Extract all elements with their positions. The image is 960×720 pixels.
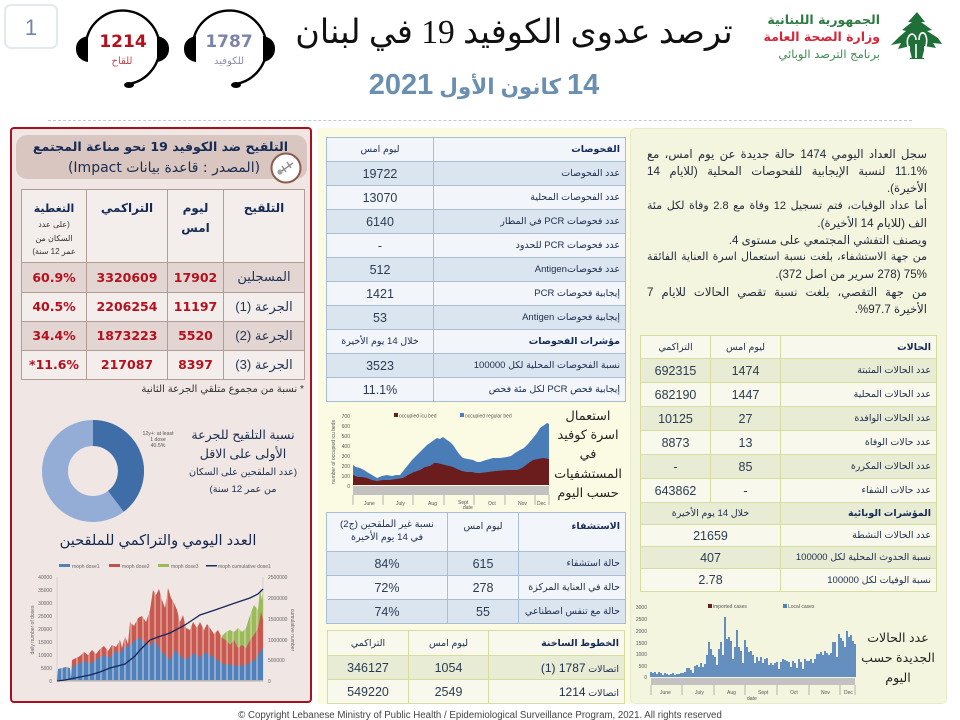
tests table: عدد فحوصات PCR للحدود: [516, 240, 620, 251]
tests table: عدد فحوصاتAntigen: [535, 264, 620, 275]
hotlines table: الخطوط الساخنة: [541, 638, 619, 648]
hospital beds chart: 400: [342, 444, 350, 450]
vaccination table: التراكمي: [101, 201, 153, 215]
cases table: عدد الحالات المكررة: [851, 461, 931, 472]
tests table: [326, 137, 626, 402]
hospital beds chart: Dec: [537, 501, 546, 507]
vaccination table: 11197: [174, 299, 217, 314]
cases table: 13: [739, 436, 752, 450]
cases table: عدد الحالات المثبتة: [857, 365, 931, 376]
cases table: 10125: [658, 412, 693, 426]
hospital beds chart: date: [463, 505, 473, 511]
tests table: 19722: [363, 166, 397, 180]
donut caption: (عدد الملقحين على السكان: [189, 467, 297, 478]
cases table: [640, 335, 937, 592]
hospital beds chart: 700: [342, 414, 350, 420]
vaccination daily chart: 10000: [38, 653, 52, 659]
daily cases chart: 3000: [636, 605, 647, 611]
cases table: 643862: [655, 484, 696, 498]
hospital chart caption: حسب اليوم: [557, 485, 619, 500]
cases table: 1447: [732, 388, 759, 402]
hospitalization table: [326, 512, 626, 624]
tests table: عدد فحوصات PCR في المطار: [500, 216, 620, 227]
cases table: 27: [739, 412, 752, 426]
panel: middle background: [318, 128, 634, 704]
summary text block: 11.1% لنسبة الإيجابية للفحوصات المحلية (للايام 14: [647, 165, 927, 178]
icon: cedar logo: [891, 12, 942, 59]
vaccination daily chart: 35000: [38, 588, 52, 594]
tests table: عدد الفحوصات المحلية: [530, 192, 620, 203]
dashed divider: [48, 120, 912, 121]
vaccination table: 8397: [178, 357, 213, 372]
daily cases chart: Local cases: [788, 604, 815, 610]
daily cases chart: July: [695, 690, 704, 696]
hospital beds chart: 500: [342, 434, 350, 440]
vaccination daily chart: 0: [49, 679, 52, 685]
hotlines table: 2549: [435, 684, 462, 698]
vaccination daily chart: 20000: [38, 627, 52, 633]
cases table: 21659: [693, 528, 728, 542]
hospital beds chart: July: [396, 501, 405, 507]
summary text block: الأخيرة 97.7%.: [855, 303, 927, 316]
tests table: نسبة الفحوصات المحلية لكل 100000: [474, 360, 620, 371]
vaccination daily chart: 2000000: [268, 596, 288, 602]
vaccination table: التغطية: [34, 203, 74, 215]
hospital beds chart: occupied icu bed: [399, 414, 437, 420]
page number box: [4, 4, 58, 49]
vaccination daily chart: 2500000: [268, 575, 288, 581]
vaccination table: 3320609: [97, 270, 157, 285]
hospitalization table: حالة في العناية المركزة: [528, 582, 620, 593]
hotlines table: اتصالات 1787 (1): [541, 660, 619, 674]
daily cases chart: June: [660, 690, 671, 696]
panel: right background: [630, 128, 947, 704]
daily cases chart: date: [747, 696, 757, 702]
daily cases caption: [861, 631, 935, 686]
cases table: ليوم امس: [726, 342, 765, 352]
cases table: -: [673, 460, 678, 474]
tests table: -: [378, 238, 382, 252]
hospital beds chart: 600: [342, 424, 350, 430]
hospital beds chart: Sept: [458, 500, 469, 506]
daily cases caption: الجديدة حسب: [861, 651, 935, 665]
tests table: عدد الفحوصات: [561, 168, 620, 179]
cases table: خلال 14 يوم الأخيرة: [672, 508, 749, 519]
daily cases chart: Sept: [758, 690, 769, 696]
vaccination heading: [16, 135, 307, 179]
hospital chart caption: اسرة كوفيد: [558, 427, 618, 442]
vaccination table: الجرعة (2): [235, 328, 293, 342]
cases table: المؤشرات الوبائية: [848, 508, 931, 519]
cases table: التراكمي: [658, 342, 693, 352]
cases table: عدد الحالات الوافدة: [854, 413, 931, 424]
summary text block: 75% (278 سرير من اصل 372).: [775, 268, 927, 281]
hospital beds chart: June: [364, 501, 375, 507]
hospital beds chart: Oct: [488, 501, 496, 507]
vaccination footnote: * نسبة من مجموع متلقي الجرعة الثانية: [141, 384, 304, 395]
daily cases chart: Nov: [821, 690, 830, 696]
hospital chart caption: [554, 408, 622, 500]
hospital beds chart: [331, 413, 550, 511]
vaccination table: 1873223: [97, 328, 157, 343]
vaccination table: *11.6%: [29, 357, 79, 372]
hospital chart caption: استعمال: [566, 408, 610, 423]
hospital beds chart: 300: [342, 454, 350, 460]
tests table: خلال 14 يوم الأخيرة: [341, 336, 419, 347]
daily cases chart: 1500: [636, 641, 647, 647]
icon: virus badge: [270, 152, 302, 184]
icon: vaccine hotline headset 1214: 1214: [99, 32, 147, 52]
daily cases chart: Dec: [844, 690, 853, 696]
tests table: 6140: [366, 214, 394, 228]
vaccination table: ليوم: [183, 201, 208, 215]
daily cases chart: 0: [644, 675, 647, 681]
page number box: 1: [25, 15, 37, 40]
logo: ministry wordmark: وزارة الصحة العامة: [764, 29, 880, 44]
summary text block: الف (للايام 14 الأخيرة).: [817, 217, 927, 230]
date subtitle: 14 كانون الأول 2021: [369, 69, 599, 101]
vaccination table: 40.5%: [32, 299, 76, 314]
vaccination heading: التلقيح ضد الكوفيد 19 نحو مناعة المجتمع: [33, 139, 288, 154]
hospitalization table: 278: [473, 580, 493, 594]
donut caption: من عمر 12 سنة): [210, 484, 276, 495]
vaccination table: 60.9%: [32, 270, 76, 285]
daily and cumulative heading: العدد اليومي والتراكمي للملقحين: [60, 533, 256, 549]
tests table: 3523: [366, 358, 394, 372]
tests table: إيجابية فحوصات PCR: [534, 288, 620, 299]
icon: covid hotline headset 1787: 1787: [205, 32, 253, 52]
icon: vaccine hotline headset 1214: للقاح: [112, 56, 132, 67]
daily cases caption: اليوم: [885, 671, 911, 685]
vaccination daily chart: moph dose3: [171, 564, 199, 570]
hospital beds chart: Nov: [518, 501, 527, 507]
vaccination daily chart: 1000000: [268, 638, 288, 644]
panel: vaccination: [10, 127, 312, 703]
hospitalization table: حالة مع تنفس اصطناعي: [525, 606, 620, 617]
cases table: 1474: [732, 364, 759, 378]
cases table: 692315: [655, 364, 696, 378]
tests table: 53: [373, 310, 387, 324]
hotlines table: 346127: [347, 660, 389, 674]
hotlines table: [327, 630, 625, 704]
summary text block: ويصنف التفشي المجتمعي على مستوى 4.: [729, 234, 927, 247]
cases table: نسبة الوفيات لكل 100000: [827, 574, 931, 586]
summary text block: سجل العداد اليومي 1474 حالة جديدة عن يوم امس، مع: [647, 148, 927, 161]
donut chart: 12y+: at least: [142, 431, 174, 437]
cases table: -: [743, 484, 748, 498]
vaccination daily chart: 1500000: [268, 617, 288, 623]
vaccination daily chart: 5000: [41, 666, 52, 672]
daily cases chart: 2000: [636, 629, 647, 635]
hotlines table: ليوم امس: [429, 638, 468, 648]
hospitalization table: حالة استشفاء: [566, 558, 620, 569]
vaccination daily chart: 25000: [38, 614, 52, 620]
daily cases chart: 500: [639, 664, 647, 670]
donut caption: الأولى على الاقل: [200, 447, 286, 461]
vaccination table: عمر 12 سنة): [32, 247, 76, 256]
vaccination daily chart: daily number of doses: [30, 605, 36, 654]
tests table: ليوم امس: [360, 144, 400, 155]
vaccination table: (على عدد: [38, 220, 70, 229]
icon: vaccine hotline headset 1214: [76, 9, 169, 88]
donut caption: [189, 428, 297, 495]
vaccination table: 17902: [174, 270, 217, 285]
hospital beds chart: 100: [342, 474, 350, 480]
tests table: مؤشرات الفحوصات: [529, 336, 620, 347]
vaccination daily chart: 0: [268, 679, 271, 685]
hospitalization table: 84%: [374, 556, 400, 570]
cases table: الحالات: [897, 342, 931, 352]
vaccination heading: (المصدر : قاعدة بيانات Impact): [68, 160, 260, 176]
daily cases chart: 2500: [636, 617, 647, 623]
vaccination table: الجرعة (3): [235, 357, 293, 372]
hospitalization table: في 14 يوم الأخيرة: [351, 532, 423, 542]
cases table: 407: [700, 550, 721, 564]
vaccination table: الجرعة (1): [235, 298, 293, 314]
hospital beds chart: 0: [347, 484, 350, 490]
daily cases chart: 1000: [636, 652, 647, 658]
tests table: 13070: [363, 190, 397, 204]
logo: ministry wordmark: [764, 12, 880, 61]
hospitalization table: الاستشفاء: [572, 521, 620, 532]
vaccination daily chart: 15000: [38, 640, 52, 646]
icon: covid hotline headset 1787: [184, 9, 275, 88]
hospitalization table: نسبة غير الملقحين (ج2): [340, 518, 434, 530]
hospital beds chart: number of occupied icu beds: [331, 420, 337, 484]
hospitalization table: ليوم امس: [463, 521, 503, 532]
donut caption: نسبة التلقيح للجرعة: [191, 428, 295, 442]
summary text block: من جهة الاستشفاء، بلغت نسبة استعمال اسرة العناية الفائقة: [647, 251, 927, 263]
summary text block: من جهة التقصي، بلغت نسبة تقصي الحالات للايام 7: [647, 286, 927, 299]
hospital beds chart: 200: [342, 464, 350, 470]
daily cases caption: عدد الحالات: [867, 631, 929, 645]
hospitalization table: 615: [473, 556, 493, 570]
tests table: 11.1%: [363, 382, 397, 396]
hospital beds chart: Aug: [428, 501, 437, 507]
daily cases chart: imported cases: [713, 604, 747, 610]
daily cases chart: Oct: [790, 690, 798, 696]
hotlines table: التراكمي: [351, 638, 385, 648]
vaccination daily chart: [30, 564, 295, 685]
vaccination table: 217087: [101, 357, 153, 372]
vaccination daily chart: moph dose2: [122, 564, 150, 570]
cases table: عدد حالات الوفاة: [865, 437, 931, 448]
icon: covid hotline headset 1787: للكوفيد: [214, 56, 244, 67]
vaccination daily chart: 500000: [268, 658, 285, 664]
summary text block: أما عداد الوفيات، فتم تسجيل 12 وفاة مع 2.8 وفاة لكل مئة: [647, 200, 927, 212]
cases table: عدد الحالات المحلية: [854, 389, 931, 400]
hospitalization table: 72%: [374, 580, 400, 594]
tests table: 512: [370, 262, 390, 276]
hospitalization table: 74%: [374, 604, 400, 618]
title: ترصد عدوى الكوفيد 19 في لبنان: [295, 14, 733, 51]
vaccination table: امس: [181, 221, 210, 235]
vaccination daily chart: 40000: [38, 575, 52, 581]
cases table: نسبة الحدوث المحلية لكل 100000: [796, 552, 931, 563]
tests table: الفحوصات: [571, 144, 620, 155]
vaccination daily chart: cumulative number: [289, 609, 295, 651]
donut chart: 40.5%: [151, 443, 166, 449]
logo: ministry wordmark: الجمهورية اللبنانية: [767, 12, 880, 27]
summary text block: الأخيرة).: [887, 182, 927, 195]
tests table: إيجابية فحوصات Antigen: [522, 312, 620, 323]
vaccination daily chart: 30000: [38, 601, 52, 607]
cases table: 8873: [662, 436, 689, 450]
cases table: عدد حالات الشفاء: [862, 485, 931, 496]
hotlines table: اتصالات 1214: [559, 684, 619, 698]
hotlines table: 1054: [435, 660, 462, 674]
vaccination table: المسجلين: [237, 269, 291, 284]
cases table: عدد الحالات النشطة: [852, 530, 931, 541]
vaccination table: [21, 189, 305, 380]
tests table: 1421: [366, 286, 394, 300]
vaccination table: السكان من: [35, 234, 73, 242]
hospital chart caption: في: [580, 446, 596, 461]
cases table: 2.78: [698, 573, 723, 587]
hospital chart caption: المستشفيات: [554, 466, 622, 481]
hotlines table: 549220: [347, 684, 389, 698]
summary text block: [647, 148, 927, 316]
vaccination daily chart: moph cumulative dose1: [218, 564, 271, 570]
logo: ministry wordmark: برنامج الترصد الوبائي: [778, 47, 880, 61]
hospitalization table: 55: [476, 604, 490, 618]
vaccination table: 34.4%: [32, 328, 76, 343]
daily cases chart: [636, 604, 856, 702]
vaccination daily chart: moph dose1: [72, 564, 100, 570]
vaccination table: 5520: [178, 328, 213, 343]
cases table: 85: [739, 460, 752, 474]
vaccination table: 2206254: [97, 299, 157, 314]
vaccination table: التلقيح: [244, 201, 284, 215]
daily cases chart: Aug: [727, 690, 736, 696]
tests table: إيجابية فحص PCR لكل مئة فحص: [489, 384, 620, 395]
hospital beds chart: occupied regular bed: [465, 414, 512, 420]
donut chart: 1 dose: [150, 437, 166, 443]
cases table: 682190: [655, 388, 696, 402]
donut chart: [42, 420, 174, 522]
